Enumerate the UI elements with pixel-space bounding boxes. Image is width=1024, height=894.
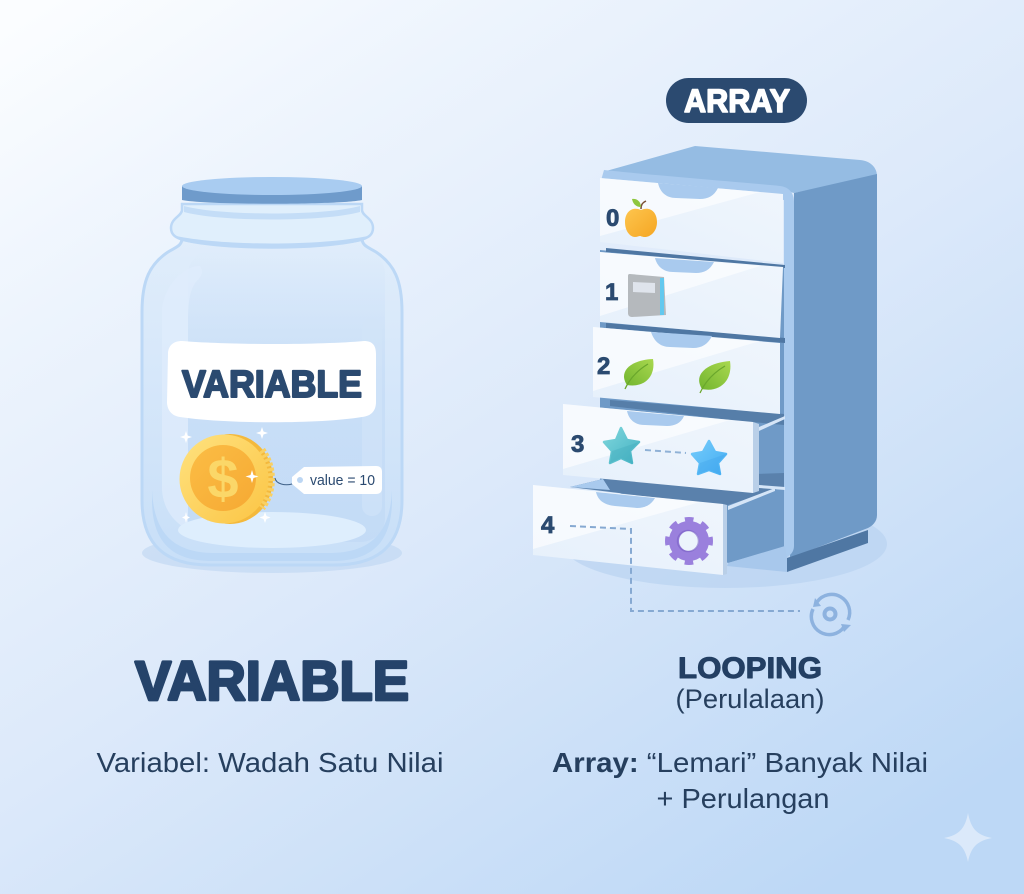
drawer 3: [563, 404, 759, 493]
icon: gold coin: $: [207, 447, 239, 510]
label: variable: VARIABLE: [182, 364, 362, 406]
jar highlight left: [162, 266, 202, 530]
drawer 3: 3: [571, 431, 584, 458]
cabinet side: [790, 174, 877, 558]
icon: corner sparkle: [944, 813, 992, 862]
cabinet top: [606, 146, 877, 193]
cabinet interior: [600, 250, 784, 563]
drawer 4: [533, 485, 727, 575]
jar highlight right: [362, 318, 382, 516]
panel: variable jar: [142, 177, 402, 573]
badge: array: ARRAY: [684, 83, 790, 119]
caption: array: Array: “Lemari” Banyak Nilai: [552, 747, 928, 778]
value tag: [275, 466, 382, 494]
icon: blue star: [692, 441, 726, 474]
cabinet base: [787, 530, 868, 572]
dashed connector: [645, 450, 686, 453]
icon: apple: [625, 199, 657, 237]
jar neck: [171, 204, 373, 248]
jar neck band: [184, 206, 360, 220]
icon: gold coin: [180, 434, 273, 524]
icon: gear: [668, 520, 710, 562]
jar floor: [178, 512, 366, 548]
icon: leaf: [624, 359, 653, 389]
drawer 4: 4: [541, 512, 555, 539]
jar neck lower band: [176, 236, 368, 248]
badge: array: [666, 78, 807, 123]
drawer 2: 2: [597, 353, 610, 380]
drawer 1: 1: [605, 279, 618, 306]
caption: array: [552, 747, 928, 814]
icon: book: [628, 274, 666, 317]
jar body: [142, 238, 402, 565]
cabinet shadow: [563, 500, 887, 588]
jar lid: [182, 177, 362, 204]
dashed loop line: [570, 526, 800, 611]
label: variable: [167, 341, 376, 422]
panel: array cabinet: [533, 146, 887, 635]
heading: variable: VARIABLE: [135, 649, 409, 712]
icon: leaf: [699, 361, 730, 393]
value tag: value = 10: [310, 472, 375, 489]
jar bottom band: [152, 490, 392, 561]
drawer 1: [600, 252, 783, 338]
subheading: perulalaan: (Perulalaan): [676, 684, 824, 714]
jar shadow: [142, 533, 402, 573]
caption: variable: Variabel: Wadah Satu Nilai: [96, 747, 444, 778]
icon: loop: [811, 594, 851, 635]
drawer 2: [593, 327, 780, 414]
jar centre shade: [188, 250, 385, 542]
cabinet floor: [727, 546, 787, 572]
drawer 0: [600, 178, 783, 263]
drawer 0: 0: [606, 205, 619, 232]
shelf slots: [570, 248, 785, 510]
heading: looping: LOOPING: [678, 652, 822, 685]
caption: array: + Perulangan: [656, 783, 830, 814]
sparkles: [180, 427, 270, 523]
icon: teal star: [604, 428, 639, 463]
cabinet front frame: [600, 170, 794, 558]
